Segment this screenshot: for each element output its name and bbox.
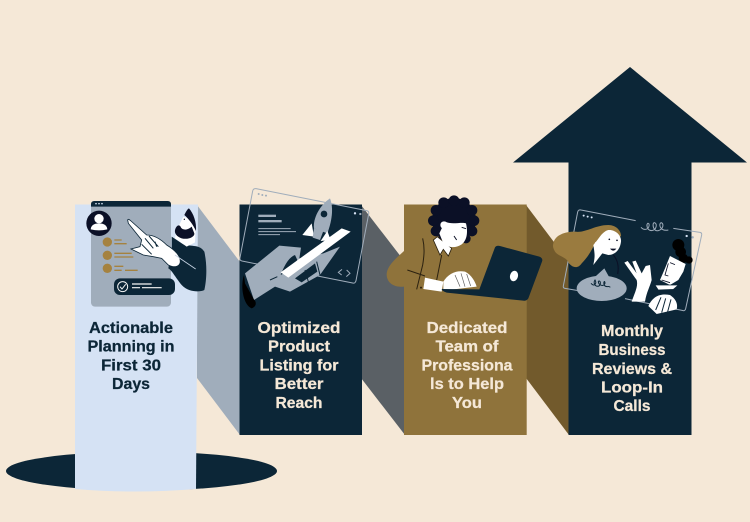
text: panel 4 label: Business — [598, 342, 666, 359]
panel 2 background — [240, 204, 362, 435]
panel 3: dedicated team — [387, 195, 542, 435]
text: panel 1 label — [88, 320, 174, 393]
text: panel 4 label: Loop-In — [601, 380, 663, 396]
text: panel 1 label: Planning in — [88, 338, 174, 356]
text: panel 2 label — [258, 320, 340, 412]
text: panel 3 label: Dedicated — [426, 320, 508, 337]
icon: curly-haired person at laptop — [387, 195, 542, 301]
text: panel 2 label: Listing for — [260, 358, 338, 374]
text: panel 3 label: Team of — [436, 338, 499, 356]
text: panel 3 label: Professiona — [422, 358, 513, 374]
side shadow: third to fourth panel — [526, 205, 569, 435]
text: panel 4 label: Reviews & — [592, 361, 672, 378]
side shadow: first to second panel — [197, 205, 240, 435]
side shadow: second to third panel — [361, 205, 405, 435]
icon: video call window with two people — [553, 210, 702, 314]
icon: checklist card with pointing man — [86, 201, 206, 307]
panel 1: actionable planning — [75, 201, 206, 492]
panel 3 background — [404, 204, 527, 435]
panel 2: optimized listing — [240, 189, 369, 435]
text: panel 2 label: Product — [268, 338, 331, 356]
text: panel 2 label: Optimized — [258, 320, 340, 337]
text: panel 4 label: Monthly — [601, 323, 663, 340]
arrow shape — [513, 67, 747, 435]
panel 4: upward arrow with monthly reviews — [513, 67, 747, 435]
text: panel 1 label: Days — [112, 376, 150, 393]
icon: browser window, rocket and hand with pen — [240, 189, 369, 308]
panel 1 background — [75, 204, 198, 492]
hole ellipse under first panel — [6, 452, 277, 490]
text: panel 3 label: You — [452, 395, 482, 412]
text: panel 2 label: Reach — [276, 395, 322, 412]
text: panel 1 label: Actionable — [89, 320, 173, 337]
text: panel 4 label — [592, 323, 672, 415]
text: panel 3 label: ls to Help — [430, 376, 504, 393]
text: panel 1 label: First 30 — [101, 358, 161, 374]
text: panel 3 label — [422, 320, 513, 412]
text: panel 2 label: Better — [274, 376, 324, 393]
text: panel 4 label: Calls — [614, 398, 651, 415]
